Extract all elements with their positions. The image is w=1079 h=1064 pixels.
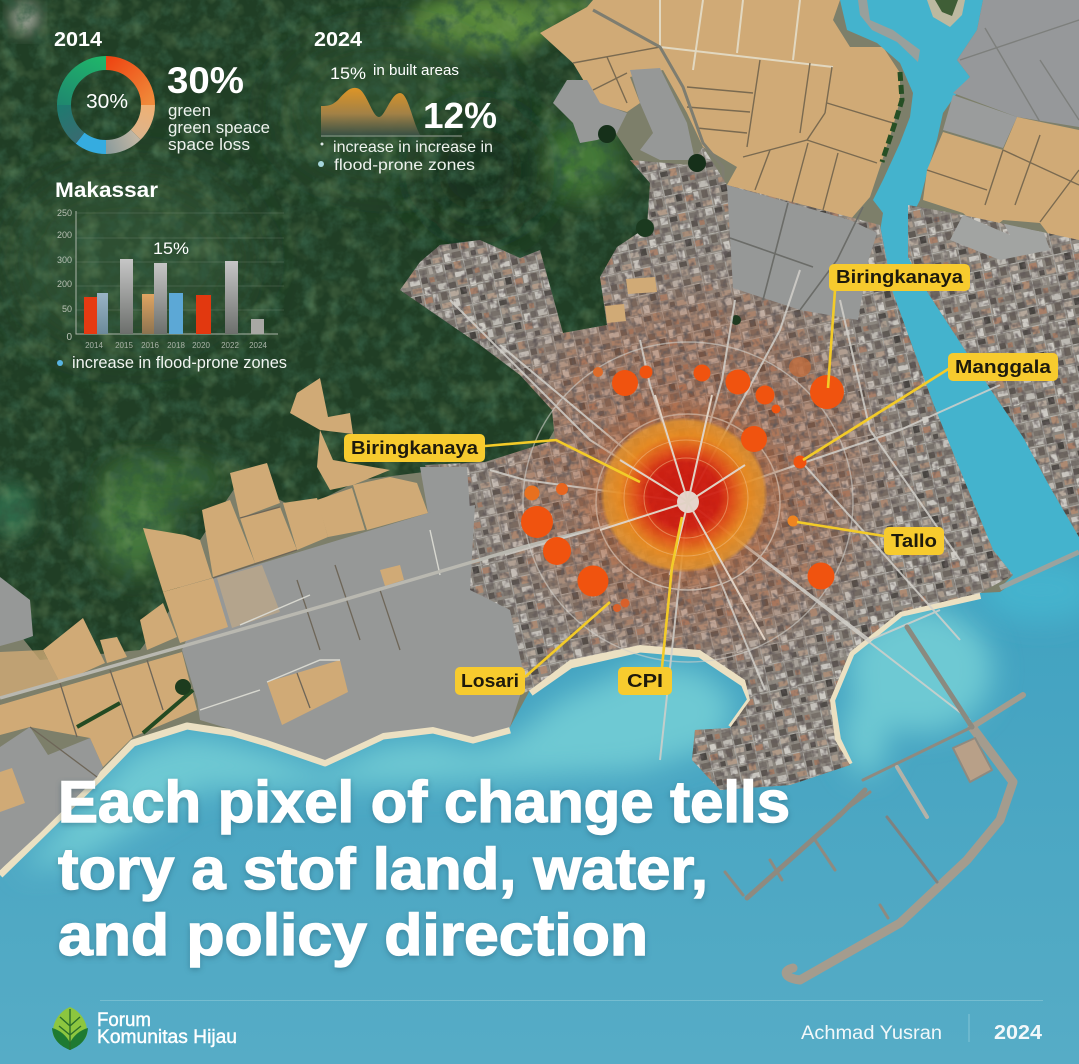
farmland north: tan	[540, 0, 900, 220]
radial roads	[450, 270, 1000, 760]
bar value 15%: 15%	[153, 239, 189, 258]
shallow coastal water	[20, 608, 992, 870]
harbour block	[953, 738, 992, 782]
harbour structures and breakwater	[725, 627, 1023, 980]
main breakwater	[786, 727, 1013, 980]
farmland west: tan fields	[0, 378, 428, 812]
headline	[58, 770, 790, 968]
top-right river	[840, 0, 1079, 588]
headline: Each pixel of change tells	[58, 770, 790, 835]
farmland west: grey fields	[0, 467, 525, 870]
label: Losari	[455, 667, 525, 695]
highway	[0, 530, 590, 698]
organisation name: Forum	[97, 1010, 151, 1031]
x-axis labels: 2024	[249, 341, 267, 350]
label: Tallo	[884, 527, 944, 555]
grey fields north of city	[553, 68, 877, 320]
headline: tory a stof land, water,	[58, 837, 708, 902]
north grey field lines and tree clumps	[598, 125, 863, 325]
label: CPI: CPI	[627, 671, 663, 691]
grey fields north east	[953, 0, 1079, 127]
bridge over river mouth	[1000, 552, 1079, 588]
heading Makassar: Makassar	[55, 179, 158, 202]
flood-prone caption: flood-prone zones	[334, 157, 475, 174]
legend: increase in flood-prone zones	[72, 354, 287, 372]
forest	[0, 0, 665, 660]
bars	[84, 259, 264, 334]
x-axis labels: 2020	[192, 341, 210, 350]
x-axis labels: 2022	[221, 341, 239, 350]
stat 12%: 12%	[423, 95, 497, 136]
organisation name: Komunitas Hijau	[97, 1027, 237, 1048]
label: Biringkanaya west: Biringkanaya	[351, 438, 479, 458]
heat-map hotspots	[521, 357, 844, 612]
author: Achmad Yusran	[801, 1023, 942, 1044]
heading 2014: 2014	[54, 29, 103, 51]
city-centre white plaza	[677, 491, 699, 513]
x-axis labels: 2018	[167, 341, 185, 350]
heading 2024: 2024	[314, 29, 363, 51]
x-axis labels	[85, 341, 267, 350]
donut chart: 30%	[86, 91, 128, 113]
western field dividers and hedges	[30, 507, 440, 777]
x-axis labels: 2014	[85, 341, 103, 350]
x-axis labels: 2016	[141, 341, 159, 350]
heat-map core	[582, 395, 786, 640]
donut chart	[64, 63, 148, 147]
stat 15% in built areas	[330, 62, 459, 83]
panel: Makassar bar chart	[55, 179, 287, 372]
axis tick labels: 200	[57, 279, 72, 289]
flood-prone caption: increase in increase in	[333, 139, 493, 156]
axis tick labels: 50	[62, 304, 72, 314]
axis tick labels: 300	[57, 255, 72, 265]
river islands	[858, 0, 965, 62]
organisation name	[97, 1010, 237, 1048]
panel: 2024 built areas	[314, 29, 497, 174]
year: 2024	[994, 1022, 1043, 1044]
flood-prone caption	[318, 139, 493, 174]
small tan plots in city	[605, 277, 657, 323]
farmland north: field lines	[573, 0, 902, 210]
city fabric	[380, 140, 1040, 800]
axis tick labels: 200	[57, 230, 72, 240]
panel: 2014 green space	[54, 29, 270, 154]
forest tonal patches	[0, 0, 700, 660]
label: Biringkanaya north: Biringkanaya	[836, 267, 964, 287]
label: Tallo: Tallo	[891, 531, 937, 551]
stat caption	[168, 101, 270, 154]
river-mouth bright water	[980, 558, 1079, 622]
stat caption: space loss	[168, 135, 250, 154]
stat 15% in built areas: in built areas	[373, 62, 459, 79]
area chart	[321, 88, 462, 136]
axis tick labels: 0	[66, 332, 72, 343]
headline: and policy direction	[58, 903, 648, 968]
grey and tan fields east	[943, 95, 1017, 148]
footer	[52, 1000, 1043, 1050]
label: Manggala	[948, 353, 1058, 381]
label: CPI	[618, 667, 672, 695]
beach strips	[0, 594, 980, 875]
axis tick labels: 250	[57, 208, 72, 218]
connector lines	[485, 290, 950, 677]
stat 30%: 30%	[167, 60, 244, 101]
east-bank city	[900, 200, 1079, 540]
label: Manggala: Manggala	[955, 357, 1052, 377]
label: Biringkanaya north	[829, 264, 970, 291]
stat 15% in built areas: 15%	[330, 64, 366, 83]
chart axes and grid	[76, 211, 284, 334]
axis tick labels	[57, 208, 72, 343]
stat caption: green	[168, 101, 211, 120]
x-axis labels: 2015	[115, 341, 133, 350]
label: Losari: Losari	[461, 671, 519, 691]
icon: green leaf logo	[52, 1007, 88, 1050]
stat caption: green speace	[168, 118, 270, 137]
label: Biringkanaya west	[344, 434, 485, 462]
